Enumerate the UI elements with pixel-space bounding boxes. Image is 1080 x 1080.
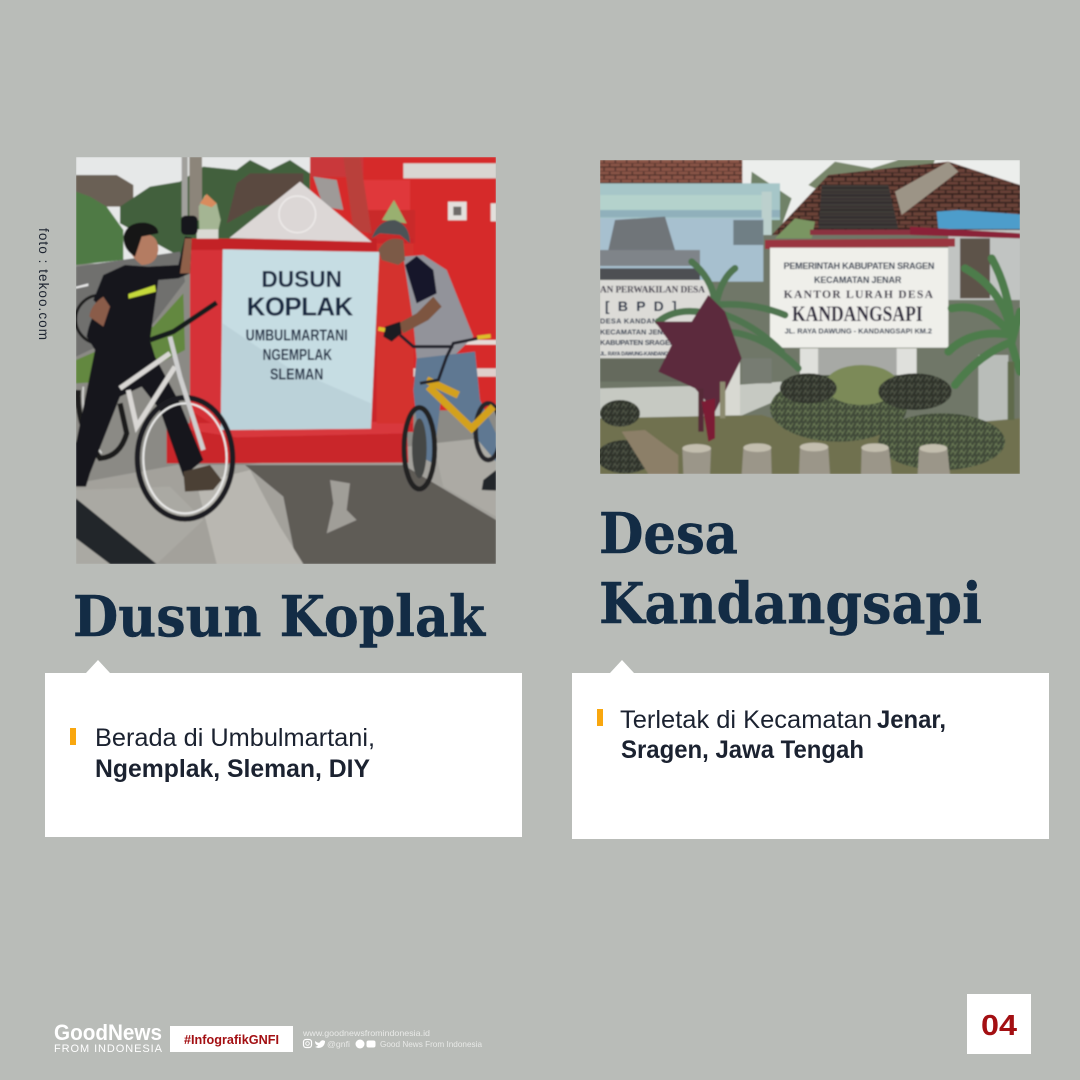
right palm bbox=[948, 258, 1020, 420]
sign text: DUSUN bbox=[261, 266, 342, 292]
ground and shrubs bbox=[600, 415, 1020, 474]
right roof bbox=[772, 162, 1020, 235]
photo: Kantor Lurah Desa Kandangsapi: JL. RAYA DAWUNG-KANDANG bbox=[600, 352, 668, 358]
footer links and social icons: Good News From Indonesia bbox=[380, 1039, 482, 1049]
finials bbox=[199, 195, 221, 230]
photo: Kantor Lurah Desa Kandangsapi: KECAMATAN JENAR bbox=[600, 327, 674, 336]
description text: Jenar, bbox=[877, 706, 946, 734]
sign text: NGEMPLAK bbox=[263, 347, 333, 364]
description text: Berada di Umbulmartani, bbox=[95, 724, 375, 752]
photo: Kantor Lurah Desa Kandangsapi: PEMERINTAH KABUPATEN SRAGEN bbox=[784, 261, 934, 271]
photo credit: foto : tekoo.com bbox=[36, 228, 51, 340]
left cyclist bbox=[76, 216, 222, 492]
page number: 04 bbox=[981, 1010, 1017, 1042]
photo: Kantor Lurah Desa Kandangsapi: DESA KANDANG bbox=[600, 316, 664, 325]
logo: GoodNews From Indonesia bbox=[54, 1020, 163, 1055]
sign text bbox=[246, 266, 354, 383]
left BPP signboard bbox=[600, 280, 710, 358]
logo: GoodNews From Indonesia: GoodNews bbox=[54, 1020, 162, 1045]
description text: Sragen, Jawa Tengah bbox=[621, 736, 864, 764]
footer links and social icons: www.goodnewsfromindonesia.id bbox=[302, 1028, 430, 1038]
panel: Desa Kandangsapi description bbox=[572, 660, 1049, 839]
icon: twitter bbox=[315, 1040, 325, 1048]
ground bbox=[76, 437, 496, 564]
heading: Dusun Koplak: Dusun Koplak bbox=[73, 584, 486, 650]
description text bbox=[620, 706, 946, 764]
yellow bicycle bbox=[378, 329, 501, 489]
white bicycle frame bbox=[120, 303, 233, 519]
icon: instagram bbox=[304, 1040, 312, 1048]
walls bbox=[600, 382, 782, 418]
photo: Kantor Lurah Desa Kandangsapi: KABUPATEN SRAGEN bbox=[600, 338, 675, 347]
sign text: KOPLAK bbox=[247, 292, 354, 322]
white bicycle rear wheel bbox=[76, 295, 127, 458]
photo: Kantor Lurah Desa Kandangsapi: AN PERWAKILAN DESA bbox=[600, 285, 705, 295]
icon: youtube bbox=[366, 1040, 376, 1048]
bullet marker bbox=[70, 728, 76, 745]
description text bbox=[95, 724, 375, 783]
photo: Kantor Lurah Desa Kandangsapi bbox=[600, 160, 1020, 474]
photo: Kantor Lurah Desa Kandangsapi: [ B P D ] bbox=[605, 298, 677, 314]
photo: Kantor Lurah Desa Kandangsapi: KANDANGSAPI bbox=[792, 301, 923, 326]
description text: Ngemplak, Sleman, DIY bbox=[95, 755, 370, 783]
sign panel bbox=[221, 249, 379, 430]
red building bbox=[310, 157, 496, 410]
pole bbox=[182, 157, 188, 217]
heading: Desa Kandangsapi: Kandangsapi bbox=[599, 571, 982, 637]
sign posts bbox=[800, 348, 818, 375]
pipe foreground bbox=[76, 498, 157, 564]
icon: facebook bbox=[356, 1040, 364, 1048]
monument body bbox=[190, 239, 413, 432]
footer links and social icons bbox=[302, 1028, 482, 1049]
page number bbox=[967, 994, 1031, 1054]
photo: Kantor Lurah Desa Kandangsapi: JL. RAYA DAWUNG - KANDANGSAPI KM.2 bbox=[785, 329, 932, 336]
heading: Desa Kandangsapi: Desa bbox=[599, 501, 738, 567]
left building bbox=[600, 160, 742, 183]
right cyclist bbox=[372, 220, 496, 491]
hashtag box bbox=[170, 1026, 293, 1052]
description text: Terletak di Kecamatan bbox=[620, 706, 872, 734]
main signboard bbox=[770, 248, 948, 348]
panel: Dusun Koplak description bbox=[45, 660, 522, 837]
footer links and social icons: @gnfi bbox=[327, 1039, 350, 1049]
sign text: SLEMAN bbox=[270, 366, 323, 383]
sign text: UMBULMARTANI bbox=[246, 327, 348, 344]
monument pediment bbox=[229, 182, 372, 242]
logo: GoodNews From Indonesia: FROM INDONESIA bbox=[54, 1043, 163, 1055]
photo: Kantor Lurah Desa Kandangsapi: KANTOR LURAH DESA bbox=[784, 288, 934, 301]
photo: Dusun Koplak sign with two cyclists bbox=[76, 157, 496, 564]
stone stumps bbox=[682, 443, 950, 474]
photo: Kantor Lurah Desa Kandangsapi: KECAMATAN JENAR bbox=[814, 275, 902, 285]
bullet marker bbox=[597, 709, 603, 726]
heading: Desa Kandangsapi bbox=[599, 501, 982, 637]
palm and cordyline plant bbox=[655, 262, 798, 442]
hashtag box: #InfografikGNFI bbox=[184, 1033, 279, 1047]
